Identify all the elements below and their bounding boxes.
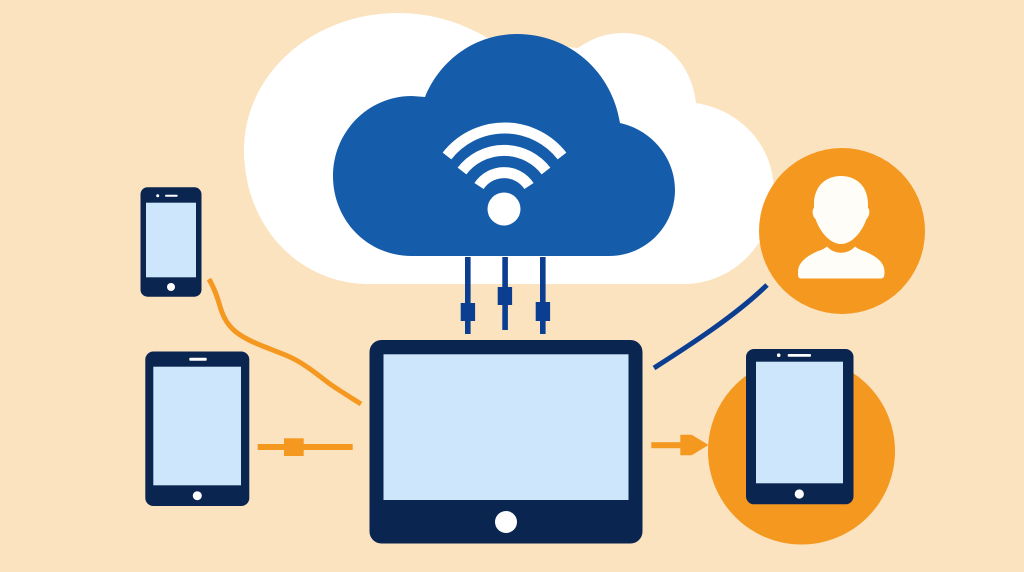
icon: wifi symbol (447, 128, 562, 226)
tablet right (746, 349, 854, 504)
white background cloud (244, 13, 774, 284)
tablet left (145, 352, 249, 506)
central monitor (370, 340, 642, 544)
blue wifi cloud (333, 34, 675, 256)
blue line from monitor to user (654, 285, 767, 368)
orange curved cable from phone (209, 279, 361, 404)
small phone top left (140, 187, 202, 297)
cable connectors from cloud to monitor (461, 257, 550, 334)
orange arrow to right tablet (651, 435, 708, 455)
blue cloud shape (333, 34, 675, 256)
orange connector from tablet (258, 438, 353, 456)
orange circle behind right tablet (708, 358, 895, 544)
icon: person (798, 176, 884, 278)
user avatar circle (759, 148, 925, 314)
